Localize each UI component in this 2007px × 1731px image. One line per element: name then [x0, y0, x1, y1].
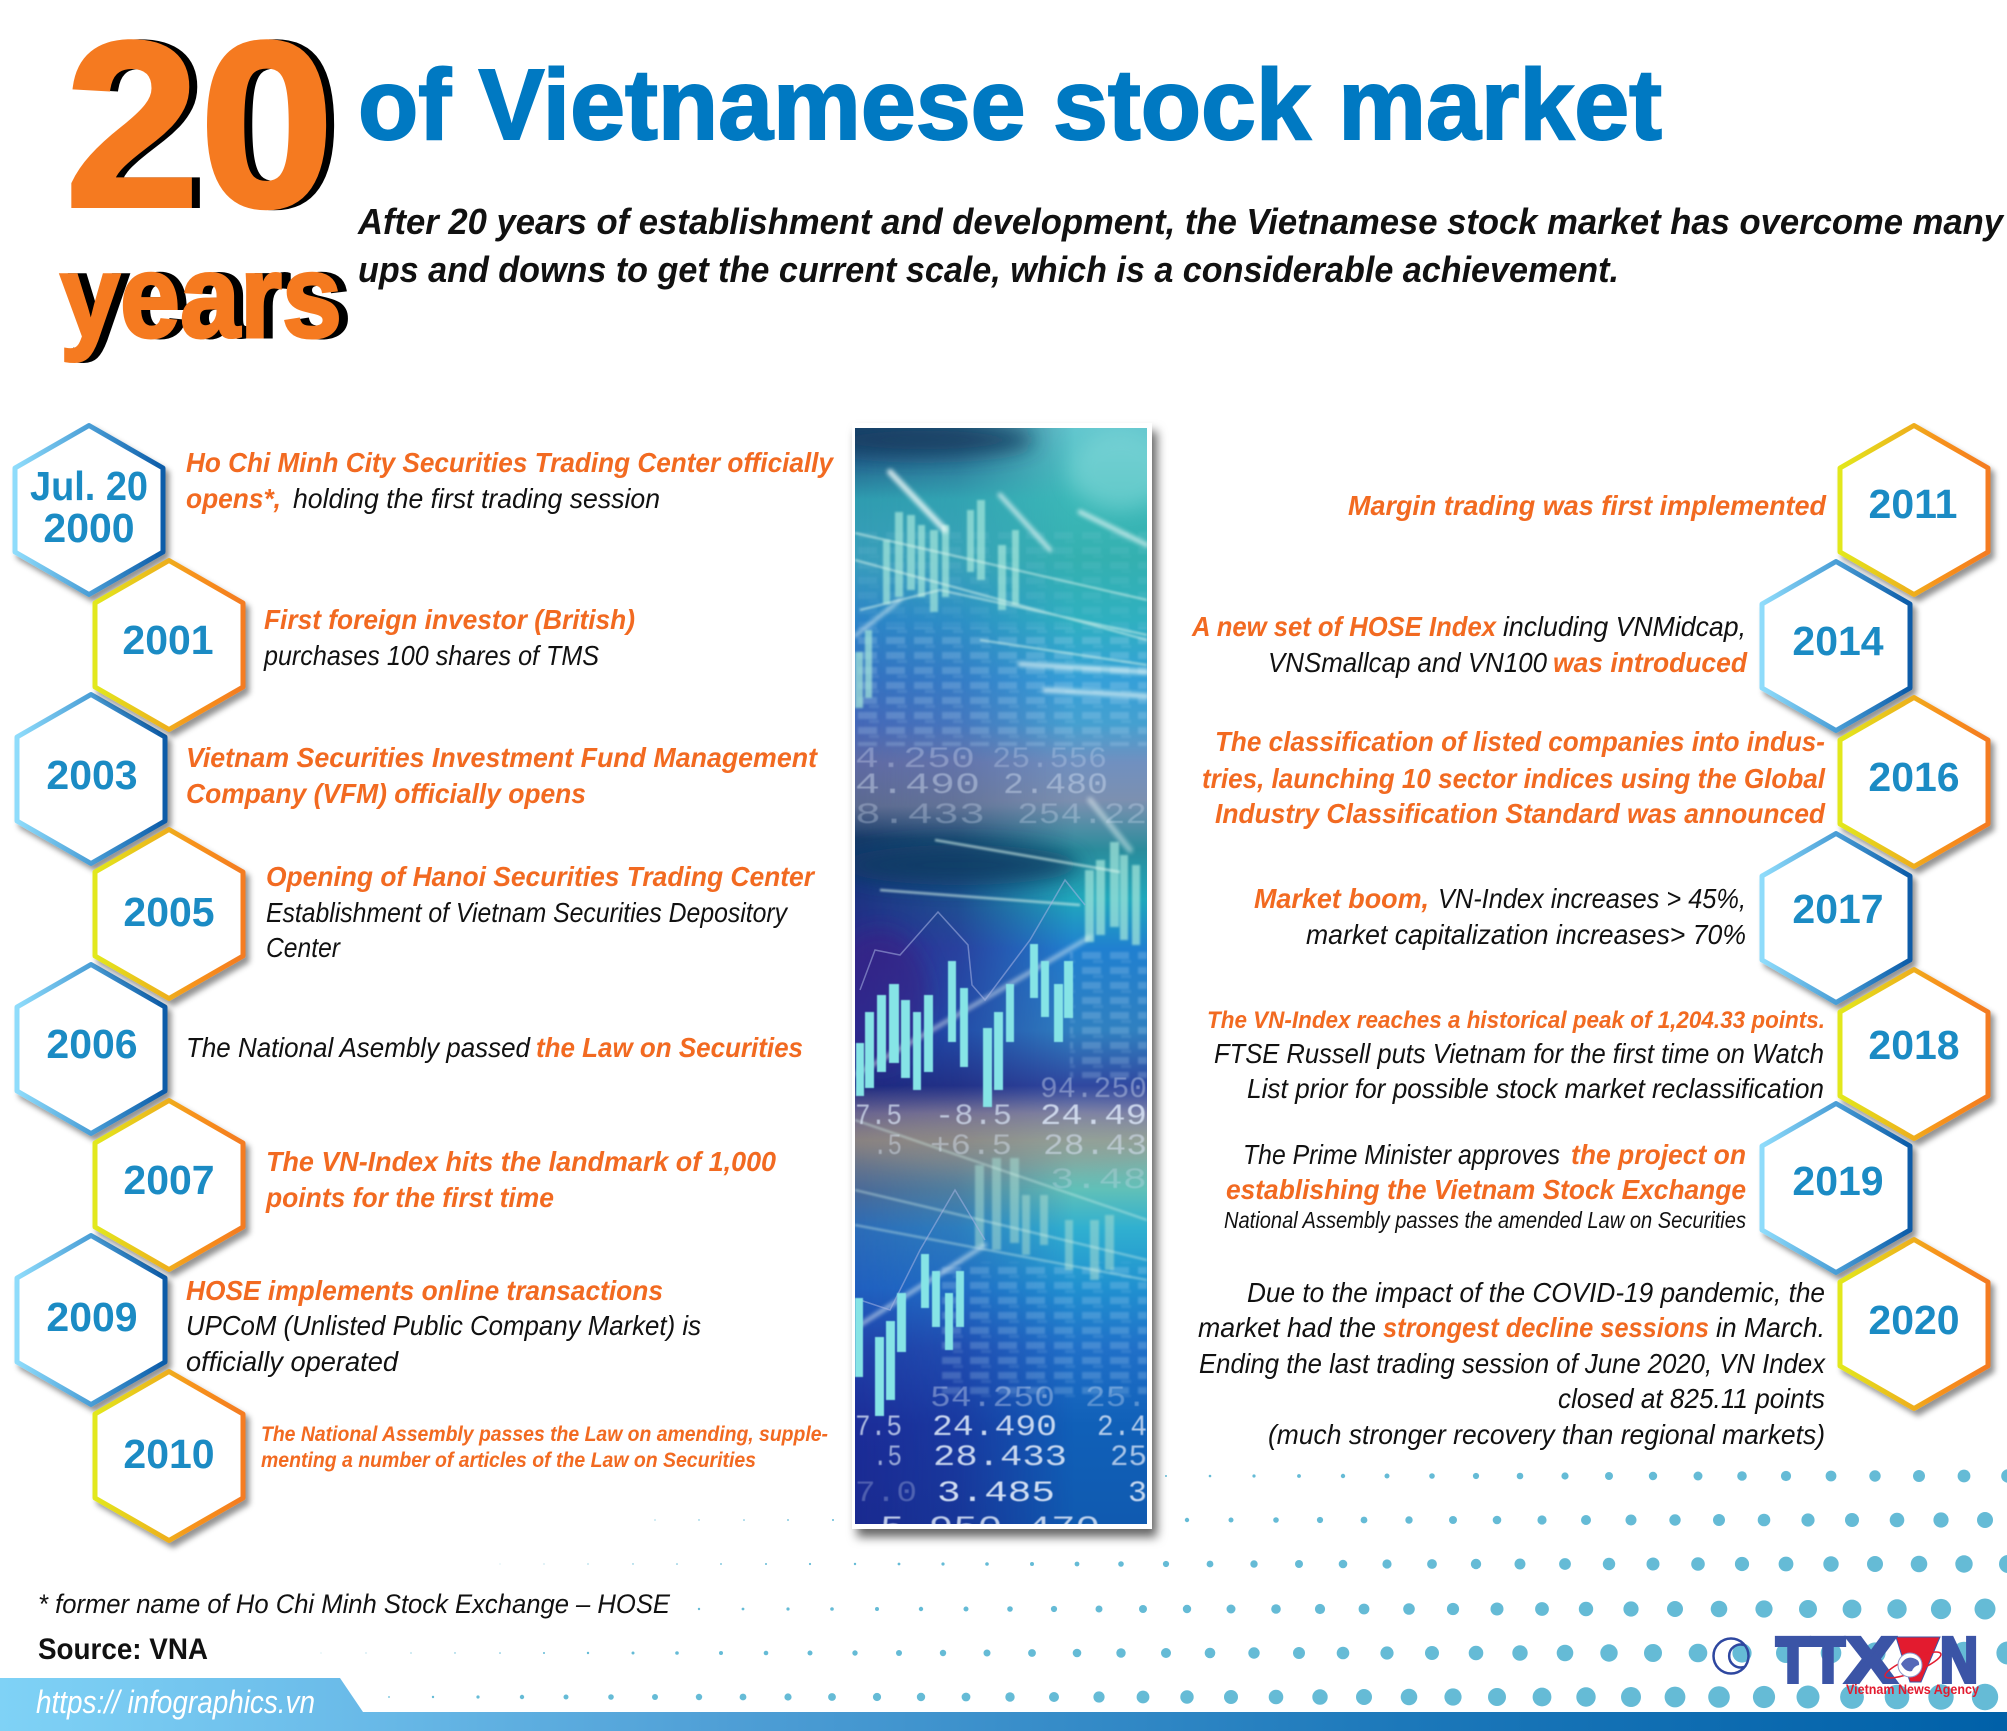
text block: 2005: Establishment of Vietnam Securities Depository: [266, 897, 789, 928]
intro text: [357, 201, 2005, 290]
hexagon: 2019: 2019: [1792, 1158, 1884, 1204]
hexagon: 2020: [1840, 1240, 1988, 1408]
text block: 2009: officially operated: [186, 1346, 399, 1377]
text block: 2016: [1202, 726, 1826, 829]
heading: 20 years: 20: [73, 0, 342, 257]
text block: 2005: [266, 861, 816, 963]
photo: ticker numbers: 4.490: [855, 769, 980, 803]
website url: https:// infographics.vn: [36, 1684, 315, 1720]
hexagon: 2001: 2001: [122, 617, 214, 663]
text block: 2017: VN-Index increases > 45%,: [1438, 883, 1746, 914]
decorative halftone dots: [321, 1469, 2007, 1710]
hexagon: 2011: 2011: [1869, 481, 1957, 527]
photo: ticker numbers: -8.5: [935, 1100, 1012, 1134]
hexagon: 2001: [95, 560, 243, 730]
photo: ticker numbers: 8.433: [855, 799, 985, 833]
text block: 2019: The Prime Minister approves: [1243, 1139, 1560, 1170]
text block: 2020: Ending the last trading session of June 2020, VN Index: [1199, 1348, 1826, 1379]
text block: Jul. 20 2000: holding the first trading session: [293, 483, 660, 514]
text block: 2007: [265, 1146, 776, 1213]
hexagon: 2014: 2014: [1792, 618, 1884, 664]
text block: 2011: Margin trading was first implemented: [1348, 490, 1827, 521]
hexagon: 2019: [1762, 1104, 1910, 1272]
photo: ticker numbers: 7.5: [855, 1411, 902, 1445]
text block: 2005: Center: [266, 932, 341, 963]
text block: 2019: National Assembly passes the amended Law on Securities: [1224, 1207, 1746, 1233]
text block: 2017: Market boom,: [1254, 883, 1429, 914]
text block: 2016: tries, launching 10 sector indices using the Global: [1202, 763, 1826, 794]
photo: ticker numbers: 7.0: [855, 1477, 917, 1511]
intro text: ups and downs to get the current scale, which is a considerable achievement.: [358, 249, 1619, 290]
text block: 2014: was introduced: [1553, 647, 1748, 678]
text block: 2017: market capitalization increases> 70%: [1306, 919, 1746, 950]
hexagon: Jul. 20 2000: Jul. 20: [30, 463, 148, 509]
photo: ticker numbers: 3: [1128, 1477, 1147, 1511]
hexagon: 2003: [17, 694, 165, 864]
photo: ticker numbers: 3.48: [1050, 1164, 1147, 1198]
heading: 20 years: years: [60, 231, 342, 363]
photo: ticker numbers: 25.556: [992, 743, 1107, 777]
hexagon: 2010: [95, 1372, 243, 1540]
photo: ticker numbers: 24.49: [1040, 1100, 1147, 1134]
hexagon: 2011: [1840, 426, 1988, 594]
panel: stock market photo: [850, 424, 1164, 1544]
text block: 2006: The National Asembly passed: [186, 1032, 531, 1063]
text block: 2018: The VN-Index reaches a historical peak of 1,204.33 points.: [1207, 1007, 1825, 1034]
logo: TTXVN Vietnam News Agency: Vietnam News Agency: [1846, 1682, 1979, 1697]
photo: ticker numbers: .5: [873, 1130, 902, 1164]
heading: 20 years: [60, 0, 351, 363]
source: Source: VNA: [38, 1633, 208, 1666]
text block: Jul. 20 2000: Ho Chi Minh City Securities Trading Center officially: [186, 447, 834, 478]
text block: 2003: Company (VFM) officially opens: [186, 778, 586, 809]
text block: 2006: [186, 1032, 803, 1063]
photo: bright candlestick bars: [855, 944, 1073, 1416]
text block: 2018: FTSE Russell puts Vietnam for the first time on Watch: [1214, 1038, 1824, 1069]
hexagon: 2020: 2020: [1868, 1297, 1960, 1343]
hexagon: 2007: [95, 1100, 243, 1270]
photo: ticker numbers: 2.4: [1097, 1411, 1147, 1445]
text block: 2006: the Law on Securities: [536, 1032, 803, 1063]
photo: ticker numbers: [855, 743, 1147, 1546]
photo: ticker numbers: 5 950 470: [880, 1512, 1100, 1546]
photo: ticker numbers: 28.433: [933, 1441, 1067, 1475]
text block: 2010: menting a number of articles of the Law on Securities: [261, 1449, 756, 1472]
text block: 2014: including VNMidcap,: [1503, 611, 1746, 642]
text block: 2018: [1207, 1007, 1825, 1104]
hexagon: 2014: [1762, 562, 1910, 730]
text block: 2020: closed at 825.11 points: [1558, 1383, 1825, 1414]
photo: ticker numbers: 254.22: [1017, 799, 1147, 833]
text block: 2010: The National Assembly passes the Law on amending, supple-: [261, 1423, 828, 1446]
text block: 2020: market had the: [1198, 1312, 1376, 1343]
logo: TTXVN Vietnam News Agency: T: [1776, 1624, 1810, 1696]
logo: copyright mark: [1714, 1638, 1748, 1674]
text block: 2017: [1254, 883, 1746, 950]
hexagon: Jul. 20 2000: 2000: [43, 505, 135, 551]
photo: ticker numbers: 4.250: [855, 743, 975, 777]
hexagon: 2018: [1840, 970, 1988, 1138]
hexagon: 2007: 2007: [123, 1157, 215, 1203]
logo: TTXVN Vietnam News Agency: [1776, 1624, 1979, 1697]
hexagon: 2018: 2018: [1868, 1022, 1960, 1068]
text block: 2009: HOSE implements online transactions: [186, 1275, 663, 1306]
text block: 2020: in March.: [1716, 1312, 1825, 1343]
hexagon: 2016: 2016: [1868, 754, 1960, 800]
text block: 2003: Vietnam Securities Investment Fund Management: [186, 742, 819, 773]
text block: 2001: purchases 100 shares of TMS: [263, 640, 599, 671]
text block: 2019: establishing the Vietnam Stock Exchange: [1226, 1174, 1746, 1205]
photo: ticker numbers: 94.250: [1040, 1073, 1147, 1107]
photo: ticker numbers: 25: [1110, 1441, 1147, 1475]
photo: ticker numbers: .5: [873, 1441, 902, 1475]
photo: upper pale candle bars: [855, 500, 1140, 945]
text block: 2007: points for the first time: [265, 1182, 554, 1213]
text block: 2003: [186, 742, 819, 809]
text block: 2001: First foreign investor (British): [264, 604, 635, 635]
logo: TTXVN Vietnam News Agency: N: [1940, 1624, 1978, 1696]
text block: 2010: [261, 1423, 828, 1472]
text block: 2014: VNSmallcap and VN100: [1268, 647, 1547, 678]
hexagon: 2005: 2005: [123, 889, 215, 935]
hexagon: 2017: [1762, 834, 1910, 1002]
text block: 2016: Industry Classification Standard was announced: [1215, 798, 1826, 829]
title: of Vietnamese stock market: [358, 49, 1662, 161]
text block: 2020: Due to the impact of the COVID-19 pandemic, the: [1247, 1277, 1825, 1308]
photo: ticker numbers: 3.485: [937, 1477, 1055, 1511]
hexagon: 2016: [1840, 698, 1988, 866]
footnote: * former name of Ho Chi Minh Stock Exchange – HOSE: [38, 1589, 671, 1619]
text block: 2019: [1224, 1139, 1746, 1233]
text block: 2007: The VN-Index hits the landmark of 1,000: [266, 1146, 776, 1177]
text block: 2020: (much stronger recovery than regional markets): [1268, 1419, 1825, 1450]
text block: 2005: Opening of Hanoi Securities Trading Center: [266, 861, 816, 892]
footer band: [0, 1678, 2007, 1731]
hexagon: Jul. 20 2000: [15, 426, 163, 594]
photo: ticker numbers: +6.5: [930, 1130, 1012, 1164]
heading: 20 years: 20: [65, 0, 334, 257]
text block: 2020: strongest decline sessions: [1383, 1312, 1709, 1343]
hexagon: 2003: 2003: [46, 752, 138, 798]
hexagon: 2006: [17, 964, 165, 1134]
hexagon: 2009: [17, 1236, 165, 1404]
photo: ticker numbers: 2.480: [1003, 769, 1108, 803]
photo: ticker numbers: 7.5: [855, 1100, 902, 1134]
hexagon: 2010: 2010: [123, 1431, 215, 1477]
text block: 2001: [263, 604, 635, 671]
logo: TTXVN Vietnam News Agency: X: [1846, 1624, 1896, 1696]
text block: 2014: A new set of HOSE Index: [1191, 611, 1497, 642]
text block: 2014: [1191, 611, 1748, 678]
text block: Jul. 20 2000: [186, 447, 834, 514]
heading: 20 years: years: [69, 231, 351, 363]
text block: 2019: the project on: [1571, 1139, 1746, 1170]
text block: 2018: List prior for possible stock market reclassification: [1247, 1073, 1824, 1104]
photo: lower ghost candle bars: [975, 1158, 1114, 1280]
text block: 2016: The classification of listed companies into indus-: [1215, 726, 1825, 757]
text block: 2009: [186, 1275, 701, 1377]
photo: ticker numbers: 24.490: [932, 1411, 1057, 1445]
photo: ticker numbers: 25.: [1085, 1382, 1147, 1416]
logo: TTXVN Vietnam News Agency: T: [1811, 1624, 1845, 1696]
text block: 2009: UPCoM (Unlisted Public Company Market) is: [186, 1310, 701, 1341]
photo: ticker numbers: 28.43: [1043, 1130, 1147, 1164]
text block: Jul. 20 2000: opens*,: [186, 483, 281, 514]
hexagon: 2017: 2017: [1792, 886, 1884, 932]
hexagon: 2005: [95, 830, 243, 998]
hexagon: 2009: 2009: [46, 1294, 138, 1340]
hexagon: 2006: 2006: [46, 1021, 138, 1067]
text block: 2020: [1198, 1277, 1826, 1450]
photo: ticker numbers: 54.250: [930, 1382, 1055, 1416]
